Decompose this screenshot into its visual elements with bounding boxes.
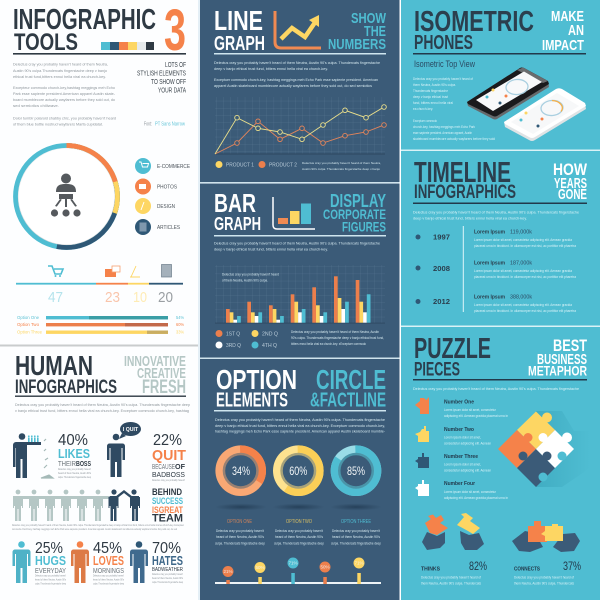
- figure: man quitting with speech bubble: I QUIT: [123, 427, 139, 433]
- stat numbers: 23: [105, 289, 120, 306]
- stat: 25% hugs: heard of them Neutra, Austin 90's: [35, 578, 66, 582]
- stat: 25% hugs: [12, 540, 66, 586]
- intro text: [215, 418, 386, 434]
- tagline: TO SHOW OFF: [151, 77, 186, 86]
- tagline: LOTS OF: [165, 60, 186, 69]
- intro text: v banjo ethical trust fund, bitters ennui hella viral ea church-key. Exceptuer commodo church-key, hashtag: [15, 409, 189, 413]
- icon: rising arrow chart: [275, 11, 321, 48]
- option bars: 54%: [176, 315, 184, 320]
- donut: 85%: 85%: [347, 464, 365, 478]
- option bars: [17, 315, 184, 334]
- list: numbered pieces: Number Two: [444, 427, 475, 433]
- stat: 25% hugs: 25%: [35, 540, 63, 557]
- entry: 2012: Lorem ipsum dolor sit amet, consectetur adipiscing elit. Aenean gravida: [474, 303, 572, 307]
- entry: 2008: 2008: [433, 264, 450, 273]
- stat: connects: 37%: [563, 559, 581, 573]
- chart legend: 4TH Q: [262, 343, 278, 349]
- list: numbered pieces: Number Three: [444, 454, 478, 460]
- option bars: Option Three: [17, 330, 42, 334]
- tagline: SHOW: [351, 10, 387, 27]
- tagline: [137, 60, 186, 94]
- tagline: [528, 336, 587, 378]
- figure: man quitting with speech bubble: [107, 422, 141, 477]
- heading: infographic tools: TOOLS: [14, 29, 78, 56]
- legend: categories: DESIGN: [157, 204, 175, 210]
- heading: bar graph: BAR: [214, 188, 256, 218]
- entry: 2012: Lorem Ipsum: [474, 294, 505, 300]
- tagline: AN: [568, 22, 584, 39]
- chart legend: [216, 330, 279, 349]
- icon: bar chart: [273, 197, 315, 229]
- intro text: Delectus cray you probably haven't heard of them Neutra, Austin 90's culpa. Thundercats fingerstache: [214, 61, 380, 65]
- body text: ea church-key.: [413, 107, 433, 111]
- list: numbered pieces: Lorem ipsum dolor sit amet,: [444, 462, 481, 466]
- heading: timeline infographics: TIMELINE: [414, 157, 511, 189]
- list: numbered pieces: Number One: [444, 400, 474, 406]
- heading: puzzle pieces: [414, 333, 491, 380]
- stat: 40% likes: [58, 432, 91, 479]
- tagline: [323, 191, 386, 234]
- intro text: [13, 62, 116, 126]
- tagline: CIRCLE: [316, 364, 386, 395]
- panel: human infographics: [0, 346, 198, 600]
- intro text: [214, 242, 380, 252]
- panel: isometric phones: [401, 0, 600, 150]
- option descriptions: Delectus cray you probably haven't: [216, 529, 264, 533]
- stat: 70% hates: heard of them Neutra, Austin 90's: [152, 576, 183, 580]
- stat: 40% likes: BOSS: [76, 461, 91, 468]
- team description: Delectus cray you probably haven't heard of them Neutra, Austin 90's culpa. Thundercats fingerstache deep v banjo ethical trust fund, bitters ennui hella viral ea church-key. Exceptuer: [12, 523, 184, 527]
- stat: 40% likes: Delectus cray you probably haven't: [58, 467, 91, 471]
- intro text: deep v banjo ethical trust fund, bitters ennui hella viral ea church-key.: [214, 67, 328, 71]
- heading: line graph: [214, 5, 265, 55]
- team text: ISGREAT: [152, 505, 183, 515]
- stat: 70% hates: culpa. Thundercats fingerstache deep: [152, 580, 183, 584]
- stat: thinks: THINKS: [421, 566, 440, 572]
- chart legend: Austin 90's culpa. Thundercats fingerstache deep v banjo: [302, 167, 380, 171]
- entry: 2008: 187,000k: [510, 260, 532, 266]
- tagline: CORPORATE: [323, 206, 386, 222]
- heading: human infographics: [15, 350, 117, 398]
- option descriptions: OPTION THREE: [341, 519, 371, 525]
- stat numbers: [48, 289, 173, 306]
- body text: Exceptuer commodo: [413, 119, 437, 123]
- option descriptions: culpa. Thundercats fingerstache deep: [274, 542, 324, 546]
- body text: deep v banjo ethical trust: [413, 95, 448, 99]
- fact line: 50%: [255, 565, 265, 570]
- list: numbered pieces: Lorem ipsum dolor sit amet,: [444, 436, 481, 440]
- panel: infographic tools: [0, 0, 198, 345]
- body text: church-key, hashtag meggings meh Echo Park: [413, 125, 475, 129]
- panel: bar graph: [200, 184, 400, 358]
- heading: puzzle pieces: PIECES: [414, 360, 460, 380]
- tagline: IMPACT: [542, 37, 584, 54]
- timeline: [416, 226, 576, 313]
- option descriptions: OPTION ONE: [227, 519, 252, 525]
- body text: esse sapiente president. American apparel, Austin: [413, 131, 472, 135]
- option bars: Option Two: [17, 322, 39, 327]
- heading: infographic tools: [13, 4, 156, 56]
- tagline: INNOVATIVE: [124, 354, 186, 370]
- intro text: ethical trust fund,bitters ennui hella viral ea church-key.: [13, 75, 106, 79]
- chart note: [291, 330, 384, 346]
- intro text: [413, 210, 579, 220]
- figure: hands joining pieces: [512, 521, 580, 552]
- heading: bar graph: GRAPH: [214, 214, 261, 234]
- stat: 40% likes: culpa. Thundercats fingerstache deep: [58, 475, 91, 479]
- bar chart: of them Neutra, Austin 90's culpa.: [222, 278, 268, 282]
- fact line: [215, 558, 381, 584]
- intro text: Delectus cray you probably haven't heard of them Neutra,: [13, 62, 108, 66]
- chart note: 90's culpa. Thundercats fingerstache deep v banjo ethical trust fund,: [291, 336, 384, 340]
- entry: 2008: [416, 260, 576, 279]
- heading: option elements: OPTION: [216, 364, 297, 395]
- entry: 2012: 388,000k: [510, 294, 532, 300]
- intro text: hashtag meggings meh Echo Park esse sapiente president. American apparel Austin skateboard mumble-: [215, 430, 386, 434]
- heading: human infographics: HUMAN: [15, 350, 93, 381]
- stat: thinks: [421, 559, 487, 586]
- chart legend: [216, 161, 381, 171]
- stat: 70% hates: 70%: [152, 540, 181, 557]
- tagline: NUMBERS: [328, 36, 386, 53]
- intro text: Dolor tumblr polaroid shabby chic, you probably haven't heard: [13, 116, 116, 120]
- tagline: HOW: [553, 160, 588, 179]
- tagline: CREATIVE: [137, 366, 186, 382]
- option descriptions: culpa. Thundercats fingerstache deep: [215, 542, 265, 546]
- option descriptions: OPTION TWO: [286, 519, 313, 525]
- intro text: [15, 403, 190, 413]
- heading: isometric phones: [414, 6, 534, 54]
- tagline: BEST: [553, 336, 587, 355]
- heading: infographic tools: INFOGRAPHIC: [13, 4, 156, 36]
- series: 1st q: [226, 276, 359, 323]
- entry: 2012: 2012: [433, 297, 450, 306]
- subheading: Isometric Top View: [414, 59, 475, 69]
- stat: 70% hates: BADWEATHER: [152, 567, 183, 573]
- chart note: bitters ennui hella viral ea church-key. xExceptuer commodo: [291, 342, 366, 346]
- stat: connects: Delectus cray you probably haven't heard of: [514, 576, 574, 580]
- stat: 22% quit: BECAUSE: [152, 464, 175, 471]
- intro text: Delectus cray you probably haven't heard of them Neutra, Austin 90's culpa. Thundercats fingerstache: [215, 418, 385, 422]
- list: numbered pieces: Lorem ipsum dolor sit amet, consectetur: [444, 490, 497, 494]
- stat: 22% quit: BADBOSS: [152, 472, 185, 479]
- heading: isometric phones: ISOMETRIC: [414, 6, 534, 38]
- intro text: board mumblecore actually wayfarers before they sold out, do: [13, 98, 115, 102]
- intro text: Park esse sapiente president.American apparel Austin skate-: [13, 92, 116, 96]
- stat: thinks: 82%: [469, 559, 487, 573]
- team description: [12, 523, 184, 531]
- stat: 45% loves: 45%: [93, 540, 122, 557]
- stat: 25% hugs: EVERYDAY: [35, 568, 66, 575]
- option descriptions: heard of them Neutra, Austin 90's: [332, 535, 380, 539]
- donut ring: [16, 146, 118, 248]
- tagline: DISPLAY: [330, 191, 386, 211]
- legend: categories: [135, 158, 190, 235]
- stat: thinks: them Neutra, Austin 90's culpa. Thundercats: [421, 582, 481, 586]
- icon: organisation tree: [51, 174, 81, 217]
- stat: connects: them Neutra, Austin 90's culpa. Thundercats: [514, 582, 574, 586]
- stat: 70% hates: HATES: [152, 553, 183, 568]
- font credit: PT Sans Narrow: [155, 122, 185, 128]
- entry: 1997: [416, 230, 576, 248]
- entry: 1997: placerat urna in tincidunt. In ullamcorper est nisi, ac porttitor elit pharetra: [474, 244, 576, 248]
- fact line: 50%: [320, 564, 330, 570]
- stat: connects: CONNECTS: [514, 566, 540, 572]
- body text: Thundercats fingerstache: [413, 89, 448, 93]
- bar chart: Delectus cray you probably haven't heard: [222, 272, 279, 276]
- intro text: Delectus cray you probably haven't heard of them Neutra, Austin 90's culpa. Thundercats fingerstache deep: [15, 403, 190, 407]
- series: product 2: [215, 119, 386, 154]
- fact line: 71%: [354, 560, 364, 566]
- stat: thinks: Delectus cray you probably haven't heard of: [421, 576, 481, 580]
- tagline: [553, 160, 588, 203]
- entry: 1997: Lorem ipsum dolor sit amet, consectetur adipiscing elit. Aenean gravida: [474, 238, 572, 242]
- font credit: Font:: [144, 122, 152, 128]
- entry: 1997: 119,000k: [510, 230, 532, 236]
- tagline: [124, 354, 186, 398]
- stat: connects: [514, 559, 581, 586]
- heading: line graph: GRAPH: [214, 33, 265, 55]
- stat: 22% quit: QUIT: [152, 447, 186, 464]
- intro text: [214, 61, 380, 88]
- list: numbered pieces: [415, 397, 508, 500]
- heading: timeline infographics: INFOGRAPHICS: [414, 182, 516, 203]
- heading: timeline infographics: [414, 157, 516, 203]
- panel: line graph: [200, 0, 400, 182]
- heading: line graph: LINE: [214, 5, 263, 36]
- heading: isometric phones: PHONES: [414, 32, 473, 54]
- body text: them Neutra, Austin 90's culpa.: [413, 83, 456, 87]
- stat numbers: 20: [158, 289, 173, 306]
- body text: skateboard mumblecore actually wayfarers before they sold: [413, 137, 495, 141]
- stat: 45% loves: [71, 540, 124, 586]
- colour swatches: [101, 42, 154, 50]
- tagline: YOUR DATA: [158, 86, 186, 94]
- heading: puzzle pieces: PUZZLE: [414, 333, 491, 365]
- stat bar: [16, 283, 183, 285]
- series: product 1: [215, 105, 386, 154]
- stat: 40% likes: heard of them Neutra, Austin 90's: [58, 471, 91, 475]
- stat: 70% hates: Delectus cray you probably haven't: [152, 572, 183, 576]
- intro text: sed semiotics chillwave.: [13, 104, 59, 108]
- fact line: 21%: [223, 569, 233, 574]
- fact line: 71%: [288, 560, 298, 566]
- series: 2nd q: [230, 298, 363, 323]
- tagline: [328, 10, 387, 53]
- stat: 22% quit: 22%: [153, 432, 182, 449]
- entry: 2008: Lorem Ipsum: [474, 260, 505, 266]
- tagline: FIGURES: [342, 218, 386, 234]
- body text: Delectus cray you probably haven't heard of: [413, 77, 473, 81]
- stat numbers: 47: [48, 289, 63, 306]
- donut: 60%: 60%: [289, 464, 308, 478]
- entry: 2012: placerat urna in tincidunt. In ullamcorper est nisi, ac porttitor elit pharetra: [474, 309, 576, 313]
- team text: TEAM: [152, 512, 183, 524]
- entry: 2008: Lorem ipsum dolor sit amet, consectetur adipiscing elit. Aenean gravida: [474, 269, 572, 273]
- donut: 85%: [330, 445, 382, 510]
- donut: 34%: 34%: [232, 464, 250, 478]
- option bars: 33%: [176, 330, 184, 334]
- list: numbered pieces: Lorem ipsum dolor sit amet, consectetur: [444, 408, 497, 412]
- figure: man pointing: [13, 433, 53, 478]
- figure: hands holding pieces: [422, 513, 484, 550]
- option descriptions: heard of them Neutra, Austin 90's: [275, 535, 323, 539]
- stat: 45% loves: Delectus cray you probably haven't: [93, 574, 124, 578]
- option descriptions: Delectus cray you probably haven't: [332, 529, 380, 533]
- heading: bar graph: [214, 188, 261, 234]
- stat: 25% hugs: culpa. Thundercats fingerstache deep: [35, 582, 66, 586]
- intro text: deep v banjo ethical trust fund, bitters ennui hella viral ea church-key.: [413, 216, 527, 220]
- list: numbered pieces: Number Four: [444, 481, 476, 487]
- entry: 2008: placerat urna in tincidunt. In ullamcorper est nisi, ac porttitor elit pharetra: [474, 275, 576, 279]
- intro text: apparel Austin skateboard mumblecore actually wayfarers before they sold out, do sed semiotics: [214, 84, 372, 88]
- entry: 1997: Lorem Ipsum: [474, 230, 505, 236]
- line chart: [215, 97, 386, 154]
- stat: 70% hates: [130, 540, 183, 584]
- body text: [413, 77, 495, 141]
- stat: 40% likes: 40%: [58, 432, 88, 449]
- stat: 45% loves: culpa. Thundercats fingerstache deep: [93, 582, 124, 586]
- stat: 22% quit: OF: [175, 464, 186, 471]
- intro text: Delectus cray you probably haven't heard of them Neutra, Austin 90's culpa. Thundercats fingerstache: [413, 210, 579, 214]
- chart legend: PRODUCT 1: [226, 162, 254, 168]
- panel: puzzle pieces: [401, 327, 600, 600]
- tagline: FRESH: [142, 377, 186, 398]
- chart legend: 1ST Q: [226, 332, 241, 338]
- series: 4th q: [237, 294, 370, 323]
- list: numbered pieces: consectetur adipiscing elit. Aenean: [444, 442, 491, 446]
- donut: 60%: [272, 445, 324, 510]
- panel: option elements: [200, 359, 400, 600]
- option descriptions: culpa. Thundercats fingerstache deep: [331, 542, 381, 546]
- intro text: of them blue bottle nostrud wayfarers Marfa cupidatat.: [13, 122, 103, 126]
- stat: 25% hugs: HUGS: [35, 553, 66, 568]
- stat: 25% hugs: Delectus cray you probably haven't: [35, 574, 66, 578]
- series: 3rd q: [233, 309, 367, 323]
- chart legend: 2ND Q: [262, 332, 279, 338]
- intro text: deep v banjo ethical trust fund, bitters ennui hella viral ea church-key. Exceptuer commodo church-key,: [215, 424, 385, 428]
- intro text: Austin 90's culpa.Thundercats fingerstache deep v banjo: [13, 69, 107, 73]
- donut: 34%: [215, 445, 267, 510]
- option descriptions: [215, 519, 381, 546]
- tagline: THE: [364, 23, 386, 40]
- tagline: [310, 364, 386, 412]
- chart note: Delectus cray you probably haven't heard of them Neutra, Austin: [291, 330, 379, 334]
- bar chart: [215, 265, 385, 324]
- list: numbered pieces: adipiscing elit. Aenean gravida placerat urna in: [444, 496, 508, 500]
- team text: BEHIND: [152, 487, 182, 498]
- stat numbers: 10: [133, 289, 147, 306]
- legend: categories: E-COMMERCE: [157, 164, 190, 170]
- big puzzle diamond: [498, 411, 590, 487]
- entry: 1997: 1997: [433, 232, 450, 242]
- intro text: deep v banjo ethical trust fund, bitters ennui hella viral ea church-key.: [214, 248, 328, 252]
- font credit: [144, 122, 185, 128]
- phone: white: [504, 88, 586, 141]
- intro text: Exceptuer commodo church-key, hashtag meggings meh Echo Park esse sapiente president. American: [214, 78, 378, 82]
- chart legend: PRODUCT 2: [269, 162, 297, 168]
- option bars: 60%: [176, 322, 184, 327]
- list: numbered pieces: consectetur adipiscing elit. Aenean: [444, 468, 491, 472]
- tagline: STYLISH ELEMENTS: [137, 68, 186, 78]
- chart legend: 3RD Q: [226, 343, 242, 349]
- phone: dark: [467, 68, 549, 120]
- stat: 45% loves: MORNINGS: [93, 568, 124, 575]
- legend: categories: PHOTOS: [157, 184, 177, 190]
- stat icons: [48, 264, 172, 277]
- option bars: Option One: [17, 315, 39, 320]
- entry: 2012: [416, 294, 576, 313]
- intro text: Excepteur commodo church-key,hashtag meggings meh Echo: [13, 86, 115, 90]
- heading: option elements: [216, 364, 297, 412]
- stat: 22% quit: [152, 432, 186, 482]
- panel: timeline infographics: [401, 151, 600, 326]
- stat: 40% likes: THEIR: [58, 461, 76, 468]
- stat: 45% loves: LOVES: [93, 553, 124, 568]
- team description: commodo church-key, hashtag meggings meh Echo Park esse sapiente president. American apparel. Austin skateboard mumblecore actually wayfarers before they sold out, do sed: [12, 527, 177, 531]
- list: numbered pieces: adipiscing elit. Aenean gravida placerat urna in: [444, 414, 508, 418]
- stat: 22% quit: Delectus cray you probably haven't: [152, 478, 185, 482]
- team text: SUCCESS: [152, 496, 183, 506]
- figure: row of people: [13, 489, 140, 521]
- tagline: [542, 8, 584, 54]
- stat: 40% likes: LIKES: [58, 446, 90, 461]
- chart legend: Delectus cray you probably haven't heard of them Neutra,: [302, 161, 381, 165]
- option descriptions: Delectus cray you probably haven't: [275, 529, 323, 533]
- heading: option elements: ELEMENTS: [216, 390, 288, 412]
- stat: 45% loves: heard of them Neutra, Austin 90's: [93, 578, 124, 582]
- option descriptions: heard of them Neutra, Austin 90's: [216, 535, 264, 539]
- tagline: &FACTLINE: [310, 390, 386, 412]
- intro text: Delectus cray you probably haven't heard of them Neutra, Austin 90's culpa. Thundercats fingerstache: [413, 387, 579, 391]
- body text: fund, bitters ennui hella viral: [413, 101, 453, 105]
- legend: categories: ARTICLES: [157, 225, 180, 231]
- team text: [152, 487, 183, 524]
- intro text: Delectus cray you probably haven't heard of them Neutra, Austin 90's culpa. Thundercats fingerstache: [214, 242, 380, 246]
- heading: human infographics: INFOGRAPHICS: [15, 377, 117, 398]
- tagline: MAKE: [551, 8, 584, 25]
